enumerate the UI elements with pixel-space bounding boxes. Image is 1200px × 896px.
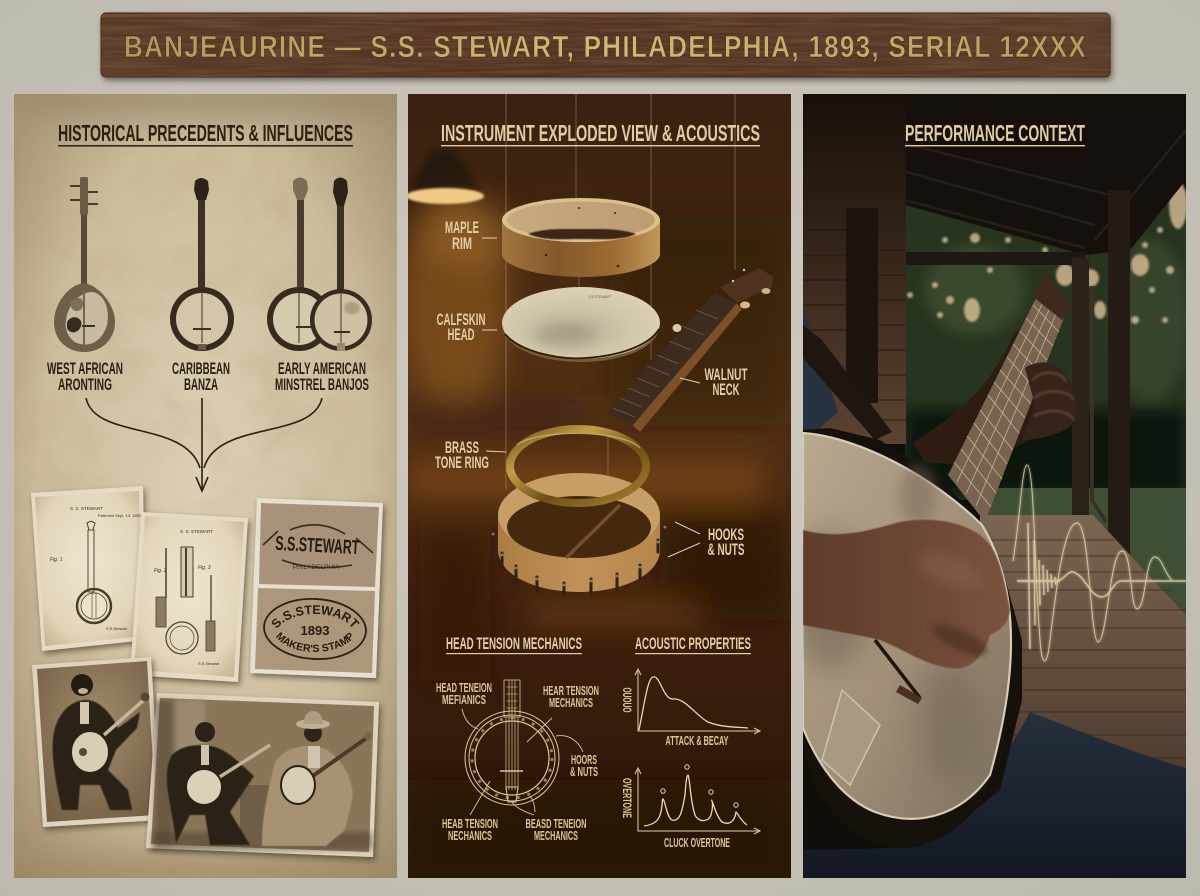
label: hooks and nuts: & NUTS	[708, 541, 744, 559]
chart: click overtone	[620, 765, 760, 850]
callout arrows	[462, 709, 583, 815]
maker's badge: S.S.STEWART	[275, 533, 360, 559]
label: early american: MINSTREL BANJOS	[275, 376, 369, 394]
diagram labels: MEFIANICS	[442, 693, 486, 707]
sound wave overlay	[1013, 465, 1186, 661]
chart: click overtone: CLUCK OVERTONE	[664, 835, 730, 850]
chart: attack and decay	[620, 669, 760, 748]
label: west african: WEST AFRICAN	[47, 360, 123, 378]
diagram labels: HOORS	[571, 753, 597, 767]
maker's stamp oval: MAKER'S STAMP	[276, 632, 352, 652]
label: maple rim	[446, 222, 497, 249]
icon: west african akonting	[54, 177, 115, 352]
workshop background	[408, 184, 791, 814]
label: calfskin head: HEAD	[448, 326, 475, 344]
scene: trees and dusk sky	[905, 181, 1190, 500]
card: patent drawing two: Fig. 2	[154, 568, 167, 574]
card: patent drawing one	[31, 486, 146, 651]
scene: strap and shirt	[803, 305, 892, 440]
card: patent drawing two: S. S. STEWART	[180, 529, 213, 534]
component: maple rim	[502, 198, 660, 277]
maker's stamp oval: 1893	[301, 623, 329, 638]
label: maple rim: RIM	[452, 235, 472, 253]
scene: wooden deck	[980, 515, 1186, 780]
label: brass tone ring	[435, 442, 506, 468]
heading: acoustic properties: ACOUSTIC PROPERTIES	[635, 635, 751, 653]
card: patent drawing two	[130, 512, 248, 682]
panel: historical precedents	[14, 94, 397, 878]
heading: acoustic properties	[635, 638, 751, 654]
label: brass tone ring: BRASS	[445, 439, 479, 457]
diagram labels: HEAR TENSION	[543, 684, 599, 698]
heading: head tension mechanics: HEAD TENSION MECHANICS	[446, 635, 582, 653]
heading: performance context: PERFORMANCE CONTEXT	[905, 120, 1085, 146]
diagram labels	[436, 681, 599, 843]
scene: lawn	[980, 488, 1186, 615]
card: patent drawing one: Patented Sept. 13, 1893	[98, 513, 142, 518]
label: west african: ARONTING	[58, 376, 112, 394]
card: patent drawing one: Fig. 1	[50, 557, 63, 563]
arrow: converging influences	[86, 398, 322, 491]
diagram labels: BEASD TENEION	[526, 817, 586, 831]
label: hooks and nuts	[668, 522, 744, 559]
component: calfskin head	[502, 287, 660, 362]
scene: fretting arm	[913, 332, 1045, 465]
icon: caribbean banza	[170, 178, 234, 351]
label: calfskin head: CALFSKIN	[436, 311, 486, 329]
photo: solo minstrel banjoist	[32, 657, 161, 827]
heading: head tension mechanics	[446, 635, 582, 654]
card: patent drawing one: S.S.Stewart	[106, 626, 128, 631]
scene: wooden wall and window	[803, 94, 906, 444]
diagram labels: HEAD TENEION	[436, 681, 492, 695]
chart: attack and decay: OUOUO	[620, 687, 632, 713]
heading: exploded view: INSTRUMENT EXPLODED VIEW & ACOUSTICS	[441, 120, 760, 146]
label: west african	[47, 362, 122, 390]
card: patent drawing one: S. S. STEWART	[70, 506, 103, 511]
label: brass tone ring: TONE RING	[435, 454, 489, 472]
label: calfskin head	[436, 314, 497, 340]
maker's stamp oval	[263, 598, 367, 660]
chart: click overtone: OVERTONE	[620, 778, 632, 818]
label: caribbean: BANZA	[184, 376, 218, 394]
heading: historical precedents: HISTORICAL PRECEDENTS & INFLUENCES	[58, 120, 353, 146]
diagram labels: NECHANICS	[448, 829, 492, 843]
banjo: body and head	[790, 428, 1022, 848]
maker's badge: PHILADELPHIA	[293, 564, 340, 571]
component: calfskin head: S.S.STEWART	[588, 295, 613, 299]
panel: exploded view and acoustics	[400, 94, 791, 878]
hand: picking hand	[803, 520, 1010, 669]
scene: jeans	[803, 712, 1186, 878]
diagram: head tension mechanics	[462, 680, 583, 815]
label: walnut neck: NECK	[712, 381, 740, 399]
tailpiece	[822, 690, 880, 785]
chart: attack and decay: ATTACK & BECAY	[666, 733, 729, 748]
label: caribbean	[172, 362, 230, 390]
hand: fretting hand	[1022, 363, 1076, 440]
component: walnut neck	[607, 268, 773, 432]
label: caribbean: CARIBBEAN	[172, 360, 230, 378]
banjo: neck and fretboard	[948, 272, 1072, 522]
diagram labels: HEAB TENSION	[442, 817, 498, 831]
scene: porch roof	[803, 94, 1186, 265]
icon: early american minstrel banjos	[267, 178, 372, 351]
maker's stamp oval: S.S.STEWART	[272, 605, 360, 628]
component: brass tone ring	[510, 429, 646, 503]
scene: porch posts	[1072, 190, 1130, 565]
icon: workshop lamp	[406, 150, 484, 204]
card: patent drawing two: Fig. 3	[198, 565, 211, 571]
label: walnut neck	[680, 368, 748, 395]
label: hooks and nuts: HOOKS	[708, 526, 744, 544]
component: lower rim with hooks and nuts	[492, 473, 666, 595]
card: maker's marks	[248, 497, 388, 684]
label: maple rim: MAPLE	[445, 219, 479, 237]
diagram labels: MECHANICS	[534, 829, 578, 843]
maker's badge	[263, 525, 373, 571]
card: patent drawing two: S.S.Stewart	[198, 661, 220, 666]
title plank	[101, 13, 1110, 77]
photo: duo of banjo players	[146, 693, 379, 857]
diagram labels: MECHANICS	[549, 696, 593, 710]
panel: performance context	[790, 94, 1190, 878]
suspension wires	[506, 94, 735, 490]
label: walnut neck: WALNUT	[704, 366, 748, 384]
diagram labels: & NUTS	[570, 765, 598, 779]
label: early american	[276, 362, 369, 390]
label: early american: EARLY AMERICAN	[278, 360, 366, 378]
